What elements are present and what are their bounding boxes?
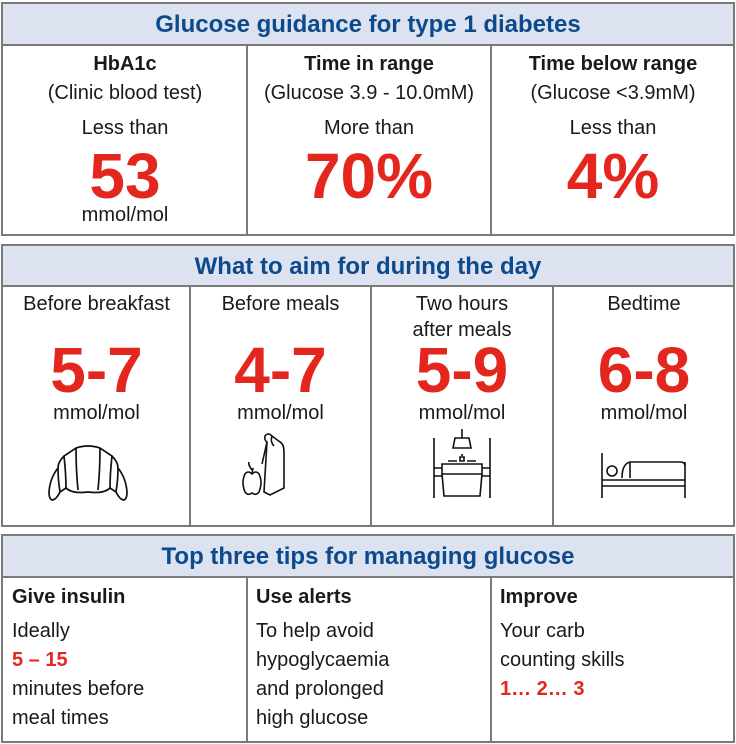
tip: improve: 1… 2… 3	[500, 678, 584, 700]
tip: use alerts: Use alerts	[256, 586, 352, 608]
tip: improve: Your carb	[500, 620, 585, 642]
column: before meals: 4-7	[234, 334, 327, 406]
tip: use alerts: hypoglycaemia	[256, 649, 389, 671]
panel: glucose guidance	[1, 2, 735, 236]
column: HbA1c: Less than	[82, 117, 168, 139]
icon: lunch bag and apple	[242, 433, 285, 496]
column: HbA1c	[48, 53, 202, 226]
icon: bed	[601, 453, 686, 498]
title: top three tips	[3, 536, 733, 578]
column: time below range: Time below range	[529, 53, 697, 75]
title: top three tips: Top three tips for managing glucose	[162, 543, 574, 570]
tip: improve: Improve	[500, 586, 578, 608]
column: time in range: 70%	[305, 140, 433, 212]
column: bedtime: mmol/mol	[601, 402, 687, 424]
title: glucose guidance	[3, 4, 733, 46]
tip: give insulin: Ideally	[12, 620, 70, 642]
column: time in range: More than	[324, 117, 414, 139]
tip: give insulin: minutes before	[12, 678, 144, 700]
panel: top three tips	[1, 534, 735, 743]
icon: croissant	[48, 445, 128, 501]
column: two hours after meals: Two hours	[416, 293, 508, 315]
column: two hours after meals: mmol/mol	[419, 402, 505, 424]
icon: dining table	[433, 429, 491, 498]
column: bedtime: Bedtime	[607, 293, 681, 315]
column: HbA1c: 53	[89, 140, 161, 212]
column: time in range	[264, 53, 474, 212]
panel: what to aim for	[1, 244, 735, 527]
tip: give insulin: 5 – 15	[12, 649, 68, 671]
column: before breakfast: Before breakfast	[23, 293, 170, 315]
column: time in range: (Glucose 3.9 - 10.0mM)	[264, 82, 474, 104]
tip: give insulin	[12, 586, 144, 729]
column: two hours after meals	[413, 293, 511, 424]
column: HbA1c: mmol/mol	[82, 204, 168, 226]
column: HbA1c: HbA1c	[93, 53, 157, 75]
title: what to aim for	[3, 246, 733, 287]
column: before breakfast: mmol/mol	[53, 402, 140, 424]
column: bedtime: 6-8	[598, 334, 690, 406]
column: bedtime	[598, 293, 690, 424]
tip: use alerts: To help avoid	[256, 620, 374, 642]
column: two hours after meals: 5-9	[416, 334, 508, 406]
column: before breakfast	[23, 293, 170, 424]
tip: use alerts	[256, 586, 390, 729]
tip: give insulin: meal times	[12, 707, 109, 729]
column: two hours after meals: after meals	[413, 319, 511, 341]
tip: improve	[500, 586, 625, 700]
column: time below range: 4%	[567, 140, 659, 212]
column: time below range: (Glucose <3.9mM)	[530, 82, 696, 104]
column: before meals: mmol/mol	[237, 402, 324, 424]
column: time below range: Less than	[570, 117, 656, 139]
column: before meals: Before meals	[222, 293, 339, 315]
column: before breakfast: 5-7	[50, 334, 143, 406]
column: HbA1c: (Clinic blood test)	[48, 82, 202, 104]
tip: give insulin: Give insulin	[12, 586, 125, 608]
column: time in range: Time in range	[304, 53, 434, 75]
tip: use alerts: and prolonged	[256, 678, 384, 700]
tip: improve: counting skills	[500, 649, 625, 671]
title: what to aim for: What to aim for during the day	[195, 253, 541, 280]
title: glucose guidance: Glucose guidance for type 1 diabetes	[155, 11, 581, 38]
column: before meals	[222, 293, 339, 424]
column: time below range	[528, 53, 697, 212]
tip: use alerts: high glucose	[256, 707, 368, 729]
